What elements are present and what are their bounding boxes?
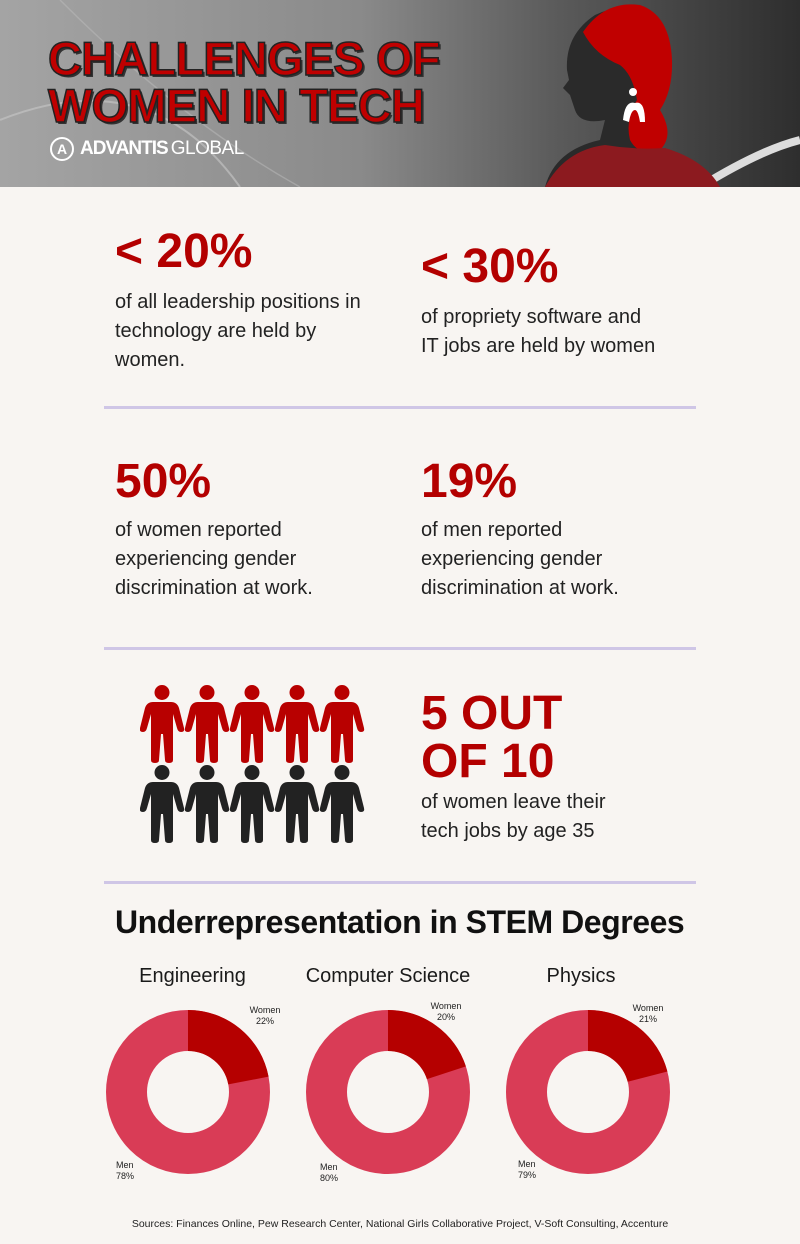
stat: 5 out of 10: OF 10 <box>421 735 554 788</box>
chart: Physics: Women <box>633 1003 663 1013</box>
stat: <20%: < 20% <box>115 225 252 278</box>
stat: <30%: of propriety software and <box>421 306 641 328</box>
icon: people pictogram <box>140 685 364 843</box>
stat: <20% <box>115 225 361 371</box>
logo: A <box>57 141 67 157</box>
stat: 50%: of women reported <box>115 519 282 541</box>
stat: <20%: technology are held by <box>115 320 316 342</box>
stat: 19% <box>421 455 619 599</box>
chart: Engineering: Men <box>116 1160 134 1170</box>
title: WOMEN IN TECH <box>48 79 424 132</box>
stat: 50% <box>115 455 313 599</box>
chart: Physics: 21% <box>639 1014 657 1024</box>
stat: <30%: < 30% <box>421 240 558 293</box>
stat: 19%: discrimination at work. <box>421 577 619 599</box>
stat: 5 out of 10: 5 OUT <box>421 687 562 740</box>
chart: Computer Science: 20% <box>437 1012 455 1022</box>
chart: Computer Science <box>306 965 470 1183</box>
chart: Physics: Men <box>518 1159 536 1169</box>
chart: Computer Science: 80% <box>320 1173 338 1183</box>
stat: 5 out of 10 <box>421 687 606 842</box>
stat: 5 out of 10: tech jobs by age 35 <box>421 820 594 842</box>
logo: GLOBAL <box>171 138 244 159</box>
stat: <30% <box>421 240 655 357</box>
chart: Computer Science: Women <box>431 1001 461 1011</box>
header banner <box>0 0 800 187</box>
chart: Physics: 79% <box>518 1170 536 1180</box>
chart: Physics <box>506 965 670 1180</box>
chart: Computer Science: Men <box>320 1162 338 1172</box>
stat: 19%: 19% <box>421 455 517 508</box>
stat: 19%: experiencing gender <box>421 548 602 570</box>
heading: STEM: Underrepresentation in STEM Degrees <box>115 904 684 940</box>
chart: Engineering: 78% <box>116 1171 134 1181</box>
logo <box>50 137 244 161</box>
chart: Engineering: Women <box>250 1005 280 1015</box>
stat: 50%: 50% <box>115 455 211 508</box>
title: CHALLENGES OF <box>48 32 440 85</box>
stat: <20%: women. <box>115 349 185 371</box>
stat: 50%: experiencing gender <box>115 548 296 570</box>
sources: Sources: Finances Online, Pew Research Center, National Girls Collaborative Project, V-Soft Consulting, Accenture <box>132 1218 668 1230</box>
logo: ADVANTIS <box>80 138 168 159</box>
chart: Engineering: Engineering <box>139 965 246 987</box>
chart: Physics: Physics <box>547 965 615 987</box>
chart: Engineering <box>106 965 280 1181</box>
title <box>47 32 441 132</box>
stat: 5 out of 10: of women leave their <box>421 791 606 813</box>
chart: Computer Science: Computer Science <box>306 965 470 987</box>
stat: 50%: discrimination at work. <box>115 577 313 599</box>
stat: <20%: of all leadership positions in <box>115 291 361 313</box>
stat: <30%: IT jobs are held by women <box>421 335 655 357</box>
stat: 19%: of men reported <box>421 519 562 541</box>
chart: Engineering: 22% <box>256 1016 274 1026</box>
icon: woman silhouette <box>545 4 720 187</box>
